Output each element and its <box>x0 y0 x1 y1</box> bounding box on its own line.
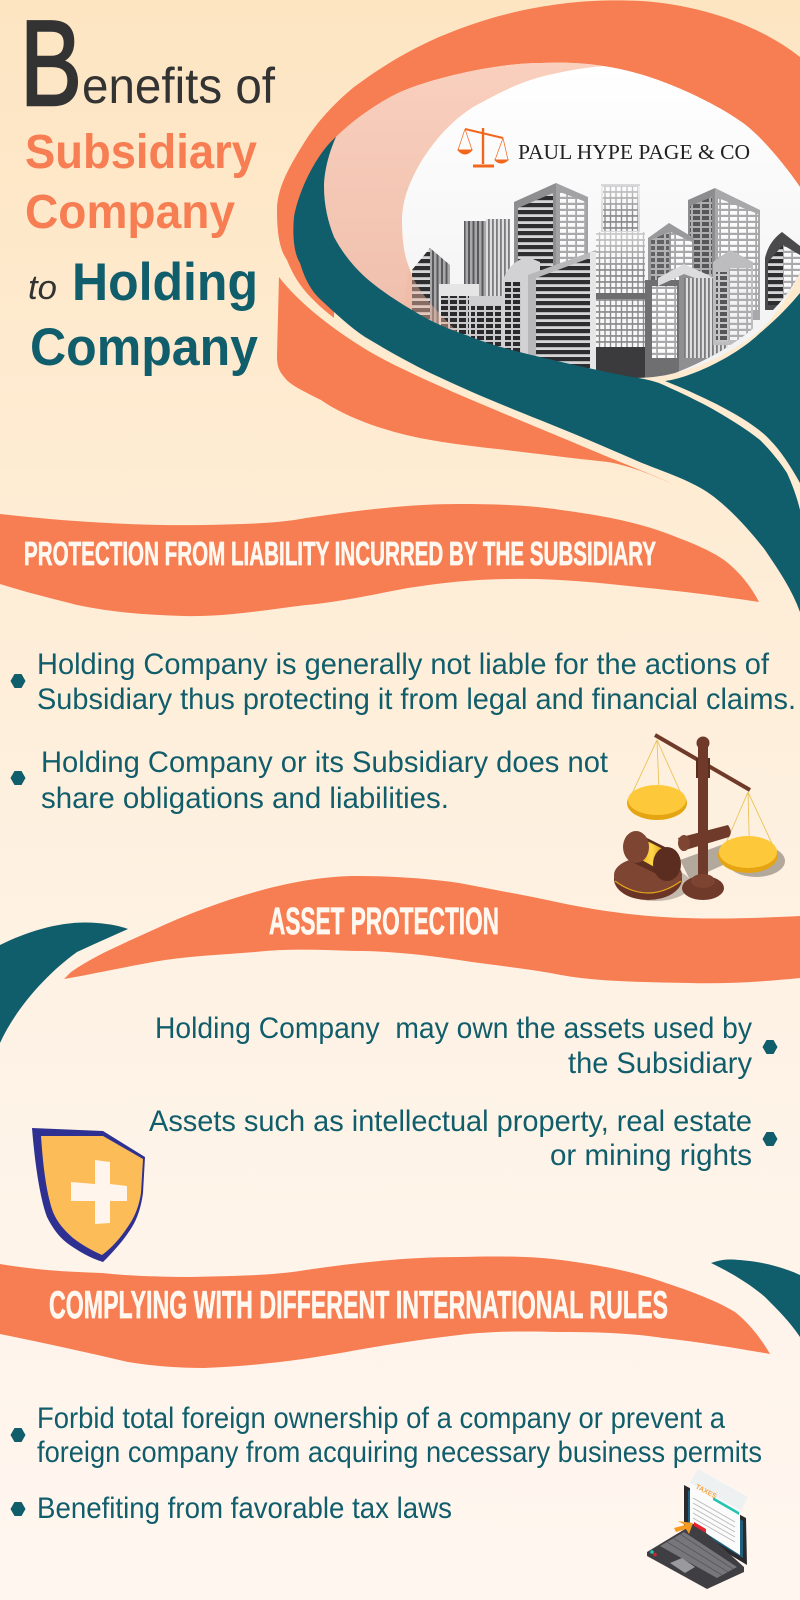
central tower <box>596 184 645 379</box>
text block: Holding Company or its Subsidiary does not <box>41 746 609 779</box>
text block: or mining rights <box>550 1139 752 1172</box>
text block: Forbid total foreign ownership of a company or prevent a <box>37 1402 725 1435</box>
text block: Holding Company is generally not liable for the actions of <box>37 648 770 681</box>
panel: protection from liability <box>0 504 796 901</box>
title: Holding <box>72 253 258 312</box>
bullet point <box>762 1040 778 1054</box>
text block <box>149 1105 752 1172</box>
heading: ASSET PROTECTION <box>269 901 499 943</box>
title: to <box>28 269 57 307</box>
icon: scales and gavel <box>614 735 785 901</box>
bullet point <box>10 674 26 688</box>
decoration: teal swoosh left <box>0 922 128 1043</box>
logo <box>458 128 750 166</box>
bullet point <box>10 1502 26 1516</box>
text block <box>37 648 796 716</box>
logo icon: scales <box>458 128 508 166</box>
panel: complying with international rules <box>0 1256 770 1589</box>
bullet point <box>10 771 26 785</box>
decoration: teal swoosh right <box>711 1259 800 1337</box>
text block <box>37 1402 762 1469</box>
title: Company <box>25 186 235 239</box>
far left tower <box>412 248 450 324</box>
icon: shield <box>32 1128 145 1262</box>
teal ribbon <box>293 137 800 612</box>
text block: the Subsidiary <box>568 1047 752 1080</box>
hero swirl with city and logo <box>277 0 800 612</box>
city skyline <box>412 183 800 380</box>
lower orange ribbon <box>277 277 677 486</box>
panel: asset protection <box>32 876 800 1262</box>
text block: Assets such as intellectual property, real estate <box>149 1105 752 1138</box>
title <box>20 0 275 377</box>
bullet point <box>10 1428 26 1442</box>
text block <box>41 746 609 815</box>
title: enefits of <box>82 58 275 114</box>
text block: share obligations and liabilities. <box>41 782 449 815</box>
title: Company <box>30 318 258 377</box>
text block <box>155 1012 752 1080</box>
logo: PAUL HYPE PAGE & CO <box>518 140 750 164</box>
icon: laptop with tax form: TAXES <box>694 1484 718 1501</box>
text block: Holding Company may own the assets used by <box>155 1012 752 1045</box>
title: Subsidiary <box>25 126 257 179</box>
bullet point <box>762 1132 778 1146</box>
text block: Benefiting from favorable tax laws <box>37 1492 452 1525</box>
icon: laptop with tax form <box>647 1469 748 1589</box>
